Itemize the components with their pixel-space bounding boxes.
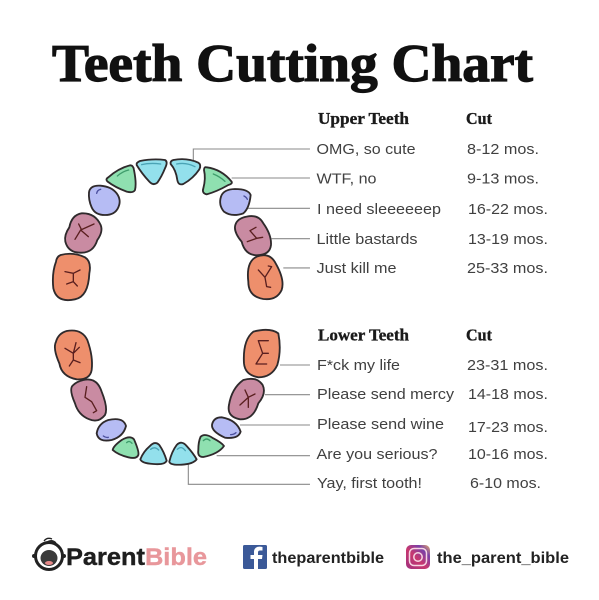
wordmark: Parent Bible: ParentBible — [66, 544, 207, 571]
footer: Parent Bible logo — [32, 538, 207, 571]
panel: upper teeth table — [316, 109, 548, 277]
footer: Facebook handle — [243, 545, 384, 569]
icon: Facebook — [243, 545, 267, 569]
tooth: lower right first molar — [229, 379, 264, 419]
row: Please send wine: Please send wine — [317, 416, 444, 433]
tooth: lower right second molar — [244, 330, 280, 377]
row: Just kill me: 25-33 mos. — [467, 260, 548, 277]
row: I need sleeeeeep: 16-22 mos. — [468, 201, 548, 218]
row: Just kill me — [316, 260, 548, 277]
row: OMG, so cute: OMG, so cute — [316, 141, 416, 158]
row: Are you serious? — [316, 446, 548, 463]
panel: lower teeth diagram — [55, 330, 310, 484]
row: I need sleeeeeep: I need sleeeeeep — [317, 201, 441, 218]
heading: cut: Cut — [466, 109, 492, 128]
tooth: lower right central incisor — [169, 443, 197, 465]
row: WTF, no — [316, 170, 539, 188]
tooth: upper right second molar — [248, 255, 283, 299]
tooth: lower right lateral incisor — [198, 435, 224, 457]
tooth: upper right central incisor — [171, 159, 200, 184]
tooth: upper right first molar — [235, 216, 271, 255]
tooth: upper left central incisor — [137, 159, 167, 184]
tooth: lower right canine — [212, 417, 241, 438]
icon: crying baby — [32, 538, 66, 570]
row: Please send mercy: 14-18 mos. — [468, 386, 548, 403]
row: Little bastards: Little bastards — [316, 231, 418, 248]
tooth: upper left lateral incisor — [106, 165, 136, 192]
heading: lower teeth: Lower Teeth — [318, 326, 409, 344]
row: Just kill me: Just kill me — [316, 260, 396, 277]
tooth: upper left canine — [89, 186, 120, 215]
row: OMG, so cute: 8-12 mos. — [467, 141, 539, 158]
row: Please send mercy — [317, 386, 548, 403]
tooth: lower left first molar — [71, 379, 106, 421]
tooth: lower left canine — [97, 419, 126, 441]
heading: upper teeth: Upper Teeth — [318, 109, 409, 128]
text: the_parent_bible: the_parent_bible — [437, 550, 569, 567]
title: Teeth Cutting Chart — [52, 35, 533, 93]
row: Please send mercy: Please send mercy — [317, 386, 455, 403]
tooth: upper left second molar — [53, 254, 90, 300]
heading: cut lower: Cut — [466, 326, 492, 344]
row: Please send wine: 17-23 mos. — [468, 419, 548, 436]
panel: lower teeth table — [316, 326, 548, 492]
row: F*ck my life: F*ck my life — [317, 357, 400, 374]
text: theparentbible: theparentbible — [272, 550, 384, 567]
row: F*ck my life — [317, 357, 548, 374]
tooth: upper right canine — [220, 189, 251, 215]
row: WTF, no: 9-13 mos. — [467, 170, 539, 188]
tooth: upper right lateral incisor — [203, 167, 232, 194]
row: Little bastards — [316, 231, 548, 248]
row: Little bastards: 13-19 mos. — [468, 231, 548, 248]
row: OMG, so cute — [316, 141, 539, 158]
row: Yay, first tooth!: Yay, first tooth! — [317, 475, 422, 492]
footer: Instagram handle — [406, 545, 569, 569]
icon: Instagram — [406, 545, 430, 569]
tooth: upper left first molar — [65, 213, 101, 253]
tooth: lower left lateral incisor — [113, 437, 138, 458]
tooth: lower left central incisor — [140, 443, 167, 464]
row: WTF, no: WTF, no — [316, 170, 376, 188]
leader lines: upper teeth — [193, 149, 310, 268]
row: Are you serious?: 10-16 mos. — [468, 446, 548, 463]
panel: upper teeth diagram — [53, 149, 310, 300]
row: Are you serious?: Are you serious? — [316, 446, 438, 463]
tooth: lower left second molar — [55, 331, 92, 379]
row: Please send wine — [317, 416, 548, 436]
row: Yay, first tooth!: 6-10 mos. — [470, 475, 541, 492]
row: Yay, first tooth! — [317, 475, 541, 492]
leader lines: lower teeth — [188, 365, 310, 484]
row: F*ck my life: 23-31 mos. — [467, 357, 548, 374]
row: I need sleeeeeep — [317, 201, 548, 218]
